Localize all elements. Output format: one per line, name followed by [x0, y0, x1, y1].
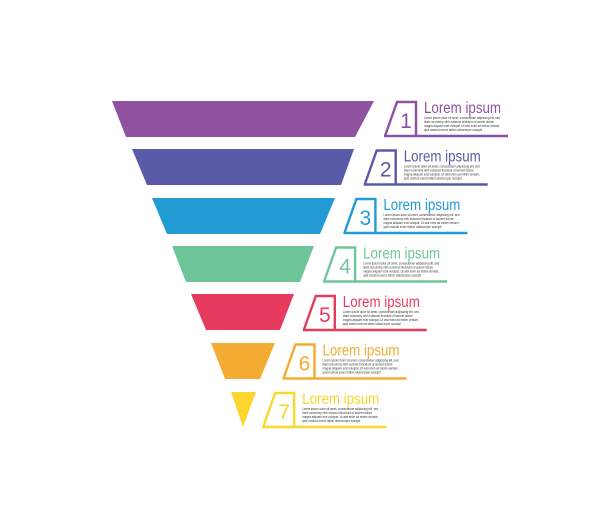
label 4: magna aliquam erat volutpat. Ut wisi enim ad minim veniam,	[363, 268, 439, 274]
funnel	[112, 101, 374, 427]
label 1: quis nostrud exerci tation ullamcorper suscipit	[424, 127, 483, 132]
label 6: quis nostrud exerci tation ullamcorper suscipit	[322, 370, 381, 374]
label 2: 2	[380, 158, 392, 182]
label 6: Lorem ipsum	[322, 342, 400, 360]
label 5: magna aliquam erat volutpat. Ut wisi enim ad minim veniam,	[343, 317, 419, 322]
label 1: Lorem ipsum dolor sit amet, consectetuer adipiscing elit, sed	[424, 115, 500, 120]
label 4: diam nonummy nibh euismod tincidunt ut laoreet dolore	[363, 264, 433, 270]
funnel band 4	[172, 246, 314, 282]
label 6: 6	[299, 352, 310, 376]
label 3: quis nostrud exerci tation ullamcorper suscipit	[383, 224, 442, 229]
label 1: magna aliquam erat volutpat. Ut wisi enim ad minim veniam,	[424, 123, 500, 128]
label 3: magna aliquam erat volutpat. Ut wisi enim ad minim veniam,	[383, 220, 459, 225]
label 5: Lorem ipsum	[343, 294, 420, 311]
label 2: quis nostrud exerci tation ullamcorper suscipit	[404, 176, 462, 180]
label 4: 4	[339, 256, 351, 278]
label 5: diam nonummy nibh euismod tincidunt ut laoreet dolore	[343, 313, 413, 318]
label 1: diam nonummy nibh euismod tincidunt ut laoreet dolore	[424, 119, 494, 124]
label 7: diam nonummy nibh euismod tincidunt ut laoreet dolore	[302, 410, 372, 415]
funnel band 3	[152, 198, 335, 234]
label 7: magna aliquam erat volutpat. Ut wisi enim ad minim veniam,	[302, 414, 378, 419]
label 5: quis nostrud exerci tation ullamcorper suscipit	[343, 321, 401, 326]
label 7: Lorem ipsum	[302, 391, 379, 408]
label 2: magna aliquam erat volutpat. Ut wisi enim ad minim veniam,	[404, 172, 480, 176]
label 2: Lorem ipsum dolor sit amet, consectetuer adipiscing elit, sed	[404, 164, 480, 168]
label 2	[364, 148, 488, 184]
label 1: 1	[400, 110, 412, 133]
label 2: Lorem ipsum	[404, 148, 481, 166]
label 4: quis nostrud exerci tation ullamcorper suscipit	[363, 272, 422, 278]
label 6: magna aliquam erat volutpat. Ut wisi enim ad minim veniam,	[322, 366, 398, 370]
funnel band 1	[112, 101, 374, 137]
label 7: Lorem ipsum dolor sit amet, consectetuer adipiscing elit, sed	[302, 406, 378, 411]
label 3: diam nonummy nibh euismod tincidunt ut laoreet dolore	[383, 216, 453, 221]
label 2: diam nonummy nibh euismod tincidunt ut laoreet dolore	[404, 168, 474, 172]
funnel band 5	[191, 294, 294, 330]
label 4: Lorem ipsum dolor sit amet, consectetuer adipiscing elit, sed	[363, 260, 439, 266]
funnel band 2	[132, 149, 354, 185]
label 5: Lorem ipsum dolor sit amet, consectetuer adipiscing elit, sed	[343, 309, 419, 314]
label 6	[282, 342, 406, 378]
label 1: Lorem ipsum	[424, 100, 501, 117]
label 3	[343, 197, 467, 233]
label 6: Lorem ipsum dolor sit amet, consectetuer adipiscing elit, sed	[322, 358, 398, 362]
label 6: diam nonummy nibh euismod tincidunt ut laoreet dolore	[322, 362, 392, 366]
label 5	[303, 294, 427, 330]
label 7: 7	[278, 401, 290, 424]
funnel band 7	[231, 392, 256, 427]
label 3: 3	[360, 207, 371, 230]
label 4: Lorem ipsum	[363, 246, 440, 262]
label 4	[323, 246, 447, 282]
funnel band 6	[211, 343, 275, 379]
label 3: Lorem ipsum dolor sit amet, consectetuer adipiscing elit, sed	[383, 212, 459, 217]
label 1	[384, 100, 508, 136]
label 3: Lorem ipsum	[383, 197, 460, 214]
label 7	[262, 391, 386, 427]
label 7: quis nostrud exerci tation ullamcorper suscipit	[302, 418, 361, 423]
label 5: 5	[319, 304, 331, 327]
